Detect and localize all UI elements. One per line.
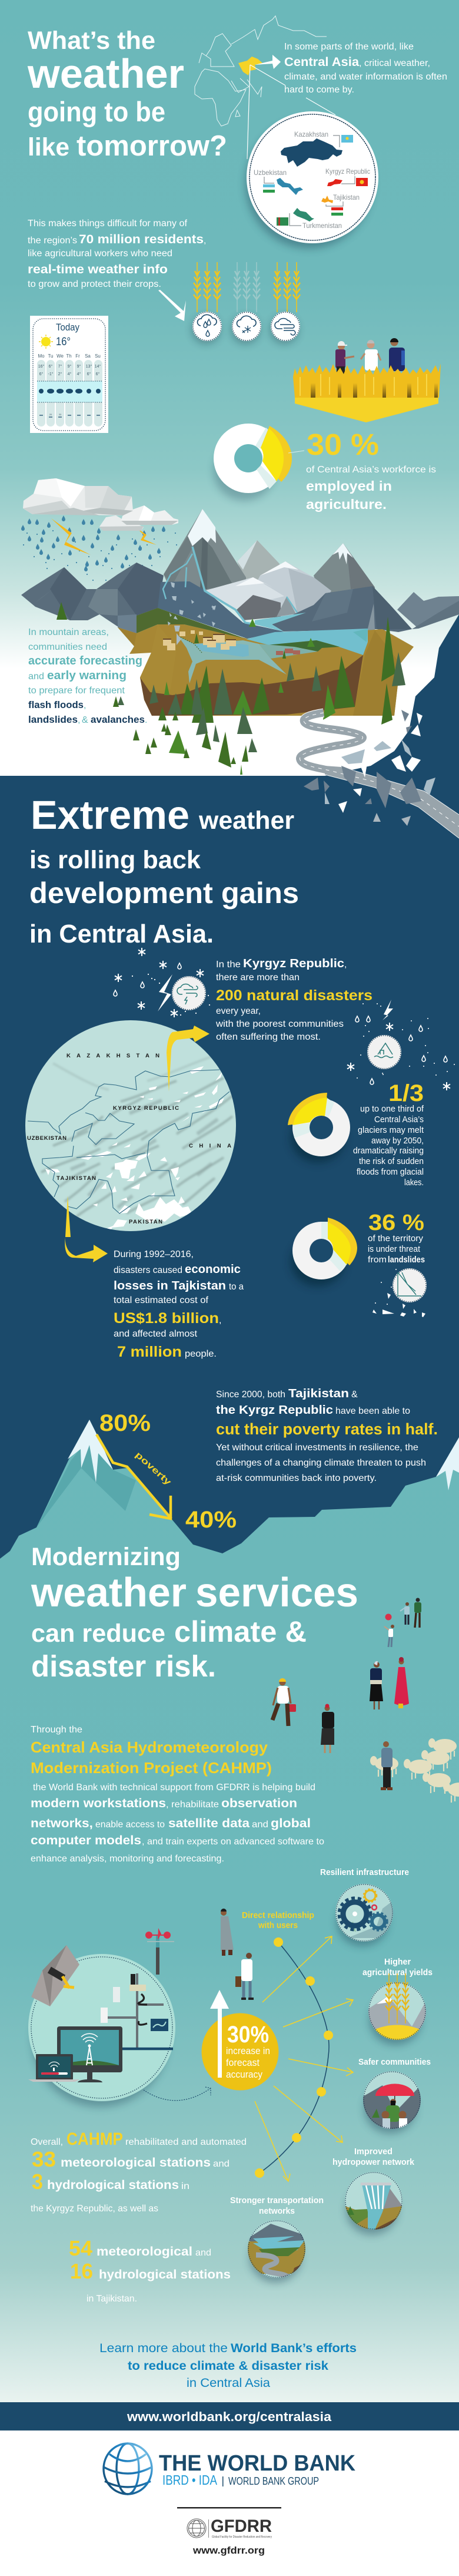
text: Central Asia Hydrometeorology Modernization Project: networks, xyxy=(31,1817,93,1830)
heading: Extreme weather is rolling back development gains xyxy=(29,792,299,948)
people: users xyxy=(221,1909,254,2000)
text: Kyrgyz Republic disasters: , xyxy=(344,960,347,970)
country: Kazakhstan xyxy=(281,130,353,167)
text: intro about Central Asia: Central Asia xyxy=(284,55,359,69)
text: 70 million residents: like agricultural workers who need xyxy=(28,249,172,259)
text: Central Asia Hydrometeorology Modernization Project: observation xyxy=(221,1797,297,1810)
text: economic losses in Tajikistan: 7 million xyxy=(117,1344,182,1360)
text: station totals xyxy=(31,2129,247,2304)
stat: 30 percent employed in agriculture xyxy=(288,428,436,512)
text: economic losses in Tajikistan: US$1.8 billion xyxy=(114,1310,219,1327)
day and temperature labels: 20 xyxy=(49,413,52,416)
benefit: improved hydropower network: Improved xyxy=(354,2147,393,2157)
illustration: storm clouds, rain and lightning xyxy=(21,478,178,580)
chart: donut 36 percent xyxy=(291,1218,357,1287)
text: Central Asia Hydrometeorology Modernization Project: Through the xyxy=(31,1725,82,1735)
text: station totals: hydrological stations xyxy=(47,2178,179,2192)
woman in green xyxy=(414,1598,421,1628)
callout: 30 percent increase in forecast accuracy: accuracy xyxy=(226,2069,262,2080)
heading: Modernizing weather services: climate & xyxy=(174,1615,307,1648)
benefit: improved hydropower network xyxy=(332,2147,415,2235)
day and temperature labels: 6° xyxy=(87,372,91,376)
map labels: UZBEKISTAN xyxy=(27,1135,66,1142)
day and temperature labels: 4° xyxy=(68,372,72,376)
benefit: higher agricultural yields: Higher xyxy=(384,1957,411,1967)
cloud small right xyxy=(121,505,178,525)
arrow: map to Kyrgyz Republic text xyxy=(167,1026,209,1092)
heading: Extreme weather is rolling back development gains: is rolling back xyxy=(29,846,201,874)
text: station totals: and xyxy=(195,2248,211,2258)
lightning xyxy=(51,518,157,555)
day and temperature labels: 7° xyxy=(58,364,62,369)
rivers xyxy=(163,547,306,631)
text: mountain areas: early warning xyxy=(47,669,127,682)
logo: World Bank: THE WORLD BANK xyxy=(159,2451,356,2476)
sheep flock xyxy=(370,1738,459,1803)
text: Central Asia Hydrometeorology Modernization Project xyxy=(31,1725,324,1864)
terrain facets xyxy=(118,624,400,716)
text: Kyrgyz Republic disasters: every year, xyxy=(216,1006,261,1016)
heading: Extreme weather is rolling back development gains: in Central Asia. xyxy=(29,920,214,948)
callout: 30 percent increase in forecast accuracy xyxy=(201,1990,279,2090)
text: 70 million residents: , xyxy=(204,236,206,246)
text: Central Asia Hydrometeorology Modernization Project: satellite data xyxy=(168,1817,250,1830)
text: station totals: CAHMP xyxy=(66,2129,123,2149)
text: intro about Central Asia xyxy=(284,42,447,95)
benefit: higher agricultural yields: agricultural yields xyxy=(362,1967,433,1978)
day and temperature labels: We xyxy=(56,353,64,359)
farmer left xyxy=(335,341,354,375)
chart: poverty falls from 80 to 40 percent: 80% xyxy=(99,1410,151,1436)
far mountains xyxy=(164,509,459,629)
satellite dish xyxy=(31,1945,79,2006)
heading: Extreme weather is rolling back development gains: Extreme xyxy=(31,792,189,838)
relief shading xyxy=(41,1054,232,1216)
callout: 30 percent increase in forecast accuracy: forecast xyxy=(226,2057,260,2068)
map labels: TAJIKISTAN xyxy=(56,1175,96,1182)
day and temperature labels: 4° xyxy=(77,372,81,376)
footer: white background xyxy=(0,2430,459,2576)
country: Kyrgyz Republic: Kyrgyz Republic xyxy=(325,167,370,176)
text: station totals: in xyxy=(181,2181,189,2191)
text: economic losses in Tajikistan: to a xyxy=(229,1282,244,1292)
day and temperature labels: 6° xyxy=(96,372,100,376)
text: intro about Central Asia: , critical weather, xyxy=(359,58,430,68)
text: learn more call to action: Learn more about the xyxy=(99,2342,228,2355)
text: Central Asia Hydrometeorology Modernization Project: , rehabilitate xyxy=(166,1800,219,1810)
text: station totals: 33 xyxy=(32,2147,56,2171)
forecast band xyxy=(37,381,102,402)
trees xyxy=(56,602,405,775)
text: mountain areas: landslides xyxy=(28,714,78,725)
worker with hard hat xyxy=(272,1678,296,1726)
country: Uzbekistan xyxy=(254,168,303,195)
icon: glacier cluster xyxy=(347,1000,454,1090)
map: terrain of Central Asia in a circle xyxy=(25,1020,236,1231)
stat: one third of glaciers: Central Asia’s xyxy=(374,1115,424,1125)
label: direct relationship with users: Direct relationship xyxy=(242,1910,314,1920)
text: learn more call to action: in Central Asia xyxy=(187,2376,270,2390)
country: Turkmenistan xyxy=(277,208,342,230)
text: poverty rates: cut their poverty rates in half. xyxy=(216,1420,438,1438)
arc: benefits timeline xyxy=(255,1937,333,2178)
text: economic losses in Tajikistan: total estimated cost of xyxy=(114,1295,209,1305)
text: mountain areas: & xyxy=(82,715,88,725)
day and temperature labels: 6° xyxy=(49,364,53,369)
panel: lower teal section with mountain silhouette xyxy=(0,1420,459,2402)
text: mountain areas: , xyxy=(84,700,86,710)
day and temperature labels: 13° xyxy=(86,364,92,369)
current conditions xyxy=(39,322,79,349)
text: station totals: meteorological xyxy=(97,2245,192,2258)
text: mountain areas xyxy=(28,627,147,725)
small weather glyphs xyxy=(39,389,101,393)
chart: poverty falls from 80 to 40 percent xyxy=(97,1410,237,1533)
terrain xyxy=(118,624,414,716)
text: Central Asia Hydrometeorology Modernization Project: modern workstations xyxy=(31,1797,166,1810)
benefit: resilient infrastructure xyxy=(320,1867,409,1946)
text: 70 million residents: real-time weather info xyxy=(28,263,168,276)
heading: Extreme weather is rolling back development gains: development gains xyxy=(29,876,299,910)
flood water xyxy=(178,636,318,683)
text: poverty rates: at-risk communities back into poverty. xyxy=(216,1473,377,1483)
map labels xyxy=(27,1053,231,1225)
country: Uzbekistan: Uzbekistan xyxy=(254,168,287,177)
map: world outline with Central Asia highlighted xyxy=(195,16,335,159)
map labels: CHINA xyxy=(189,1143,231,1149)
logo: GFDRR: Global Facility for Disaster Reduction and Recovery xyxy=(212,2535,272,2539)
heading: Modernizing weather services: weather xyxy=(31,1569,187,1615)
stat: one third of glaciers: away by 2050, xyxy=(371,1136,424,1146)
text: mountain areas: and xyxy=(28,672,44,682)
man in grey coat xyxy=(221,1909,234,1956)
illustration: weather station circle xyxy=(28,1928,175,2107)
benefit: stronger transportation networks: Stronger transportation xyxy=(230,2195,324,2205)
arrow: dotted link to forecast circle xyxy=(144,2087,211,2101)
stat: one third of glaciers: glaciers may melt xyxy=(358,1125,424,1135)
balloon xyxy=(385,1614,392,1620)
boy in blue xyxy=(400,1602,410,1625)
text: Kyrgyz Republic disasters: Kyrgyz Republic xyxy=(243,957,344,970)
text: station totals: 3 xyxy=(32,2170,43,2194)
stat: one third of glaciers: dramatically raising xyxy=(353,1146,424,1156)
text: mountain areas: avalanches xyxy=(91,714,145,725)
footer band: worldbank url: www.worldbank.org/centralasia xyxy=(127,2409,332,2424)
stat: 36 percent landslides xyxy=(368,1211,425,1265)
text: poverty rates: have been able to xyxy=(335,1406,410,1416)
logo: GFDRR: GFDRR xyxy=(211,2517,272,2536)
woman in red dress xyxy=(394,1657,409,1708)
shepherd xyxy=(381,1741,393,1790)
stat: 36 percent landslides: landslides xyxy=(388,1255,425,1265)
text: Central Asia Hydrometeorology Modernization Project: the World Bank with technical support from GFDRR is helping build xyxy=(33,1783,315,1793)
text: 70 million residents: to grow and protect their crops. xyxy=(28,279,161,289)
stat: one third of glaciers: floods from glacial xyxy=(357,1167,424,1177)
text: poverty rates: Yet without critical investments in resilience, the xyxy=(216,1443,418,1453)
arrow: map to Tajikistan text xyxy=(65,1196,108,1262)
icon: rain xyxy=(192,312,222,341)
stat: 30 percent employed in agriculture: of Central Asia’s workforce is xyxy=(306,465,436,475)
text: Central Asia Hydrometeorology Modernization Project: enhance analysis, monitoring and forecasting. xyxy=(31,1854,224,1864)
text: Central Asia Hydrometeorology Modernization Project: computer models xyxy=(31,1834,141,1847)
mast and instruments xyxy=(101,1973,173,2049)
title: What's the weather going to be like tomorrow: tomorrow? xyxy=(76,130,227,162)
benefit: resilient infrastructure: Resilient infrastructure xyxy=(320,1867,409,1877)
text: economic losses in Tajikistan: economic xyxy=(185,1263,241,1276)
day and temperature labels: 2° xyxy=(58,372,62,376)
title: What's the weather going to be like tomorrow: weather xyxy=(27,51,184,97)
text: station totals: 54 xyxy=(69,2236,92,2260)
rain xyxy=(21,515,165,571)
divider line xyxy=(177,2507,281,2508)
day and temperature labels: Tu xyxy=(48,353,54,359)
day columns xyxy=(37,360,102,426)
map labels: PAKISTAN xyxy=(129,1219,162,1225)
background: top section gradient xyxy=(0,0,459,778)
farmer right xyxy=(389,338,405,371)
text: poverty rates xyxy=(216,1387,438,1483)
day and temperature labels: 16° xyxy=(38,364,44,369)
day and temperature labels: Mo xyxy=(38,353,45,359)
text: 70 million residents: 70 million residents xyxy=(79,233,204,246)
text: station totals: rehabilitated and automated xyxy=(125,2137,247,2147)
text: Central Asia Hydrometeorology Modernization Project: and xyxy=(252,1820,268,1830)
village xyxy=(163,630,300,655)
text: Kyrgyz Republic disasters: In the xyxy=(216,960,241,970)
text: 70 million residents: the region’s xyxy=(28,236,77,246)
stat: 30 percent employed in agriculture: 30 % xyxy=(307,428,379,461)
text: Kyrgyz Republic disasters: often suffering the most. xyxy=(216,1032,321,1042)
benefit: safer communities: Safer communities xyxy=(358,2057,431,2067)
text: mountain areas: to prepare for frequent xyxy=(28,686,125,696)
text: poverty rates: challenges of a changing climate threaten to push xyxy=(216,1458,426,1468)
stat: one third of glaciers xyxy=(353,1080,424,1188)
front slate ranges xyxy=(21,563,459,655)
anemometer xyxy=(145,1928,174,1975)
footer band: worldbank url xyxy=(0,2402,459,2430)
title: What's the weather going to be like tomorrow: like xyxy=(28,133,69,161)
text: station totals: meteorological stations xyxy=(61,2156,211,2170)
text: poverty rates: Tajikistan xyxy=(288,1387,349,1400)
text: Central Asia Hydrometeorology Modernization Project: enable access to xyxy=(95,1820,165,1830)
day and temperature labels: 6° xyxy=(39,372,44,376)
illustration: farmers in wheat field xyxy=(293,338,441,422)
heading: Modernizing weather services xyxy=(31,1543,358,1683)
benefit: stronger transportation networks: networks xyxy=(259,2206,295,2216)
text: economic losses in Tajikistan: disasters caused xyxy=(114,1265,182,1275)
day and temperature labels: -1° xyxy=(48,372,54,376)
text: poverty rates: & xyxy=(351,1390,358,1400)
text: intro about Central Asia: climate, and water information is often xyxy=(284,72,447,82)
text: mountain areas: accurate forecasting xyxy=(28,654,142,667)
text: Kyrgyz Republic disasters: 200 natural disasters xyxy=(216,987,372,1004)
text: economic losses in Tajikistan: During 1992–2016, xyxy=(114,1249,194,1259)
text: mountain areas: In mountain areas, xyxy=(28,627,109,637)
icon row: wheat with rain, snow and wind xyxy=(192,262,300,344)
stat: 30 percent employed in agriculture: agriculture. xyxy=(306,497,387,512)
text: learn more call to action: to reduce climate & disaster risk xyxy=(128,2359,328,2373)
stat: 36 percent landslides: from xyxy=(368,1255,387,1265)
text: 70 million residents: This makes things difficult for many of xyxy=(28,219,188,229)
heading: Modernizing weather services: disaster risk. xyxy=(31,1649,216,1683)
text: station totals: in Tajikistan. xyxy=(87,2294,137,2304)
day and temperature labels: Th xyxy=(66,353,72,359)
title: What's the weather going to be like tomorrow: going to be xyxy=(28,96,165,127)
heading: Extreme weather is rolling back development gains: weather xyxy=(198,806,294,835)
text: station totals: the Kyrgyz Republic, as well as xyxy=(31,2204,158,2214)
cloud small left xyxy=(99,515,144,531)
stat: one third of glaciers: up to one third of xyxy=(360,1104,424,1114)
text: mountain areas: . xyxy=(145,715,147,725)
text: learn more call to action: World Bank’s efforts xyxy=(231,2342,357,2355)
borders xyxy=(28,1070,230,1213)
logo: World Bank: IBRD • IDA xyxy=(162,2472,218,2488)
text: station totals: Overall, xyxy=(31,2137,63,2147)
text: Kyrgyz Republic disasters xyxy=(215,957,372,1042)
country: Kyrgyz Republic xyxy=(325,167,370,186)
cloud large xyxy=(23,478,133,515)
map labels: KYRGYZ REPUBLIC xyxy=(113,1105,179,1112)
country: Turkmenistan: Turkmenistan xyxy=(302,221,342,230)
text: intro about Central Asia: In some parts of the world, like xyxy=(284,42,414,52)
current conditions: 16° xyxy=(56,336,71,348)
text: economic losses in Tajikistan: people. xyxy=(185,1349,217,1359)
benefit: improved hydropower network: hydropower network xyxy=(332,2157,415,2167)
lake xyxy=(246,629,368,655)
icon: storm cluster with flakes and drops xyxy=(114,948,209,1017)
text: station totals: and xyxy=(213,2159,230,2169)
monitor xyxy=(57,2026,122,2082)
text: poverty rates: the Kyrgz Republic xyxy=(216,1404,333,1417)
country: Tajikistan xyxy=(321,193,360,216)
text: Kyrgyz Republic disasters: there are more than xyxy=(216,973,300,983)
chart: poverty falls from 80 to 40 percent: 40% xyxy=(185,1507,237,1533)
text: economic losses in Tajikistan: , xyxy=(219,1315,221,1325)
stat: 36 percent landslides: is under threat xyxy=(368,1244,421,1254)
text: station totals: 16 xyxy=(70,2259,93,2283)
country: Tajikistan: Tajikistan xyxy=(333,193,360,201)
illustration: winding road xyxy=(300,713,459,838)
stat: one third of glaciers: lakes. xyxy=(404,1178,424,1188)
landslide debris on slope xyxy=(168,582,216,645)
woman in black xyxy=(321,1704,334,1753)
text: mountain areas: communities need xyxy=(28,642,107,652)
green patch xyxy=(267,640,340,652)
heading: Modernizing weather services: services xyxy=(195,1569,358,1615)
rain dashes xyxy=(39,415,100,417)
heading: Modernizing weather services: can reduce xyxy=(31,1619,165,1648)
chart: donut 30 percent xyxy=(214,424,292,501)
earth band xyxy=(140,655,363,716)
stat: 30 percent employed in agriculture: employed in xyxy=(306,478,392,494)
stat: one third of glaciers: the risk of sudden xyxy=(359,1156,424,1166)
logo: World Bank xyxy=(104,2443,356,2494)
text: Central Asia Hydrometeorology Modernization Project: Modernization Project (CAHMP) xyxy=(31,1759,272,1777)
day and temperature labels: 33 xyxy=(59,413,62,416)
text: economic losses in Tajikistan: and affected almost xyxy=(114,1329,198,1339)
illustration: people and balloon xyxy=(272,1598,459,1803)
text: Kyrgyz Republic disasters: with the poorest communities xyxy=(215,1019,344,1029)
green hillside xyxy=(137,608,245,639)
icon: snow xyxy=(232,312,261,341)
text: economic losses in Tajikistan: losses in Tajkistan xyxy=(114,1279,226,1292)
logo: World Bank: WORLD BANK GROUP xyxy=(228,2475,319,2487)
text: economic losses in Tajikistan xyxy=(114,1249,244,1360)
title: What's the weather going to be like tomorrow: What’s the xyxy=(28,27,155,55)
text: learn more call to action xyxy=(99,2342,357,2390)
glaciers xyxy=(45,1066,224,1231)
stat: one third of glaciers: 1/3 xyxy=(388,1080,424,1106)
laptop xyxy=(28,2054,79,2082)
chart: poverty falls from 80 to 40 percent: poverty xyxy=(133,1450,174,1487)
text: intro about Central Asia: hard to come by. xyxy=(284,85,354,95)
man in white shirt xyxy=(235,1953,254,2000)
icon: wind xyxy=(271,312,300,341)
text: mountain areas: flash floods xyxy=(28,699,84,710)
country: Kazakhstan: Kazakhstan xyxy=(294,130,328,138)
text: Central Asia Hydrometeorology Modernization Project: Central Asia Hydrometeorology xyxy=(31,1738,268,1756)
day and temperature labels: 14° xyxy=(95,364,101,369)
stat: 36 percent landslides: 36 % xyxy=(368,1211,424,1235)
arrows: radiating yellow xyxy=(255,1936,353,2181)
benefit: stronger transportation networks xyxy=(230,2195,324,2283)
stat: 36 percent landslides: of the territory xyxy=(368,1234,423,1244)
current conditions: Today xyxy=(56,322,79,333)
callout: 30 percent increase in forecast accuracy: 30% xyxy=(227,2022,269,2048)
icon: landslide with debris xyxy=(372,1268,427,1317)
woman in patterned dress xyxy=(370,1661,383,1709)
wheat field xyxy=(293,363,441,422)
label: direct relationship with users xyxy=(242,1910,314,1930)
day and temperature labels: 9° xyxy=(77,364,81,369)
panel: weather app card xyxy=(30,316,108,433)
day and temperature labels xyxy=(38,353,101,416)
panel: Central Asia countries circle xyxy=(245,111,378,249)
illustration: mountain landscape xyxy=(21,509,459,775)
farmer middle xyxy=(361,340,381,371)
heading: Modernizing weather services: Modernizing xyxy=(31,1543,181,1571)
day and temperature labels: Sa xyxy=(85,353,91,359)
day and temperature labels: Fr xyxy=(75,353,80,359)
chart: donut one third xyxy=(288,1093,350,1163)
text: poverty rates: Since 2000, both xyxy=(216,1390,285,1400)
benefit: higher agricultural yields xyxy=(362,1957,433,2045)
label: direct relationship with users: with users xyxy=(258,1920,298,1930)
logo: GFDRR xyxy=(187,2517,272,2539)
child xyxy=(384,1625,394,1647)
panel: dark blue section background xyxy=(0,614,459,1565)
title: What's the weather going to be like tomorrow xyxy=(27,27,227,162)
text: mountain areas: , xyxy=(78,715,80,725)
day and temperature labels: Su xyxy=(95,353,101,359)
text: station totals: hydrological stations xyxy=(99,2268,231,2281)
text: Central Asia Hydrometeorology Modernization Project: global xyxy=(271,1817,311,1830)
day and temperature labels: 9° xyxy=(68,364,72,369)
callout: 30 percent increase in forecast accuracy: increase in xyxy=(226,2045,270,2056)
text: 70 million residents xyxy=(28,219,206,289)
arrow: to weather icons xyxy=(158,290,186,321)
benefit: safer communities xyxy=(358,2057,431,2134)
illustration: falling rocks xyxy=(304,710,435,826)
text: Central Asia Hydrometeorology Modernization Project: , and train experts on advanced software to xyxy=(142,1837,324,1847)
map labels: KAZAKHSTAN xyxy=(66,1053,159,1059)
text: gfdrr url: www.gfdrr.org xyxy=(192,2545,265,2556)
